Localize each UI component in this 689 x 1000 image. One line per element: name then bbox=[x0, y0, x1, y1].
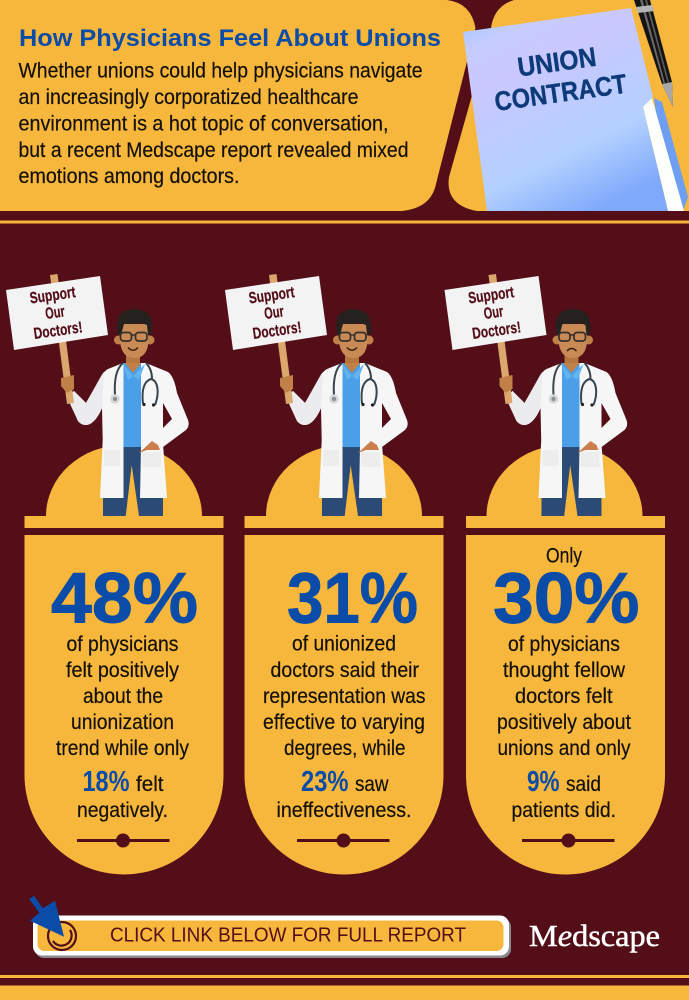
stat description: trend while only bbox=[56, 737, 189, 760]
doctor holding sign bbox=[225, 274, 408, 516]
stat description bbox=[56, 633, 189, 822]
button text: CLICK LINK BELOW FOR FULL REPORT bbox=[110, 924, 466, 946]
stat description: doctors felt bbox=[515, 685, 613, 708]
stat description: unionization bbox=[71, 711, 174, 734]
stat description bbox=[263, 632, 426, 822]
stat description: patients did. bbox=[512, 799, 616, 822]
sign text: Support bbox=[29, 284, 77, 307]
stat card bbox=[466, 535, 665, 874]
stat card bbox=[24, 535, 224, 874]
stat description: positively about bbox=[497, 711, 631, 734]
intro text: but a recent Medscape report revealed mixed bbox=[18, 139, 408, 162]
sign text: Our bbox=[483, 303, 504, 323]
panel: 30% bbox=[444, 274, 665, 874]
sign text bbox=[248, 284, 303, 343]
stat description: of physicians bbox=[66, 633, 178, 656]
stat description: unions and only bbox=[498, 737, 631, 760]
sign text: Doctors! bbox=[471, 319, 522, 343]
panel: header intro bbox=[0, 0, 689, 211]
sign text: Our bbox=[263, 303, 285, 323]
intro text: emotions among doctors. bbox=[18, 165, 240, 188]
intro text: Whether unions could help physicians navigate bbox=[18, 60, 422, 82]
stat description bbox=[497, 633, 631, 822]
icon: target rings bbox=[48, 922, 76, 950]
stat description: of unionized bbox=[292, 632, 396, 656]
sign text: Doctors! bbox=[252, 319, 303, 343]
stat number: 30% bbox=[493, 560, 640, 638]
call-to-action button bbox=[29, 896, 511, 958]
folder label: UNION bbox=[516, 42, 598, 82]
lead-in word: Only bbox=[546, 544, 582, 568]
stat description: saw bbox=[355, 773, 389, 796]
folder label: CONTRACT bbox=[493, 69, 629, 117]
sign text bbox=[29, 284, 84, 343]
panel: 48% bbox=[6, 274, 224, 874]
ornament divider bbox=[77, 834, 170, 848]
sign text: Support bbox=[248, 284, 296, 307]
podium dome and bar bbox=[244, 445, 444, 528]
doctor holding sign, frowning bbox=[444, 274, 627, 516]
stat description: thought fellow bbox=[503, 659, 626, 682]
podium dome and bar bbox=[24, 445, 224, 528]
icon: union contract folder bbox=[463, 8, 688, 211]
stat number: 31% bbox=[287, 560, 418, 638]
intro text bbox=[18, 60, 422, 188]
intro text: environment is a hot topic of conversation, bbox=[18, 112, 388, 136]
stat description: about the bbox=[83, 685, 163, 708]
stat description: 9% bbox=[527, 766, 560, 798]
stat description: effective to varying bbox=[263, 711, 425, 734]
stat description: representation was bbox=[263, 685, 426, 708]
stat description: ineffectiveness. bbox=[276, 799, 412, 822]
stat description: said bbox=[566, 773, 601, 796]
stat description: 18% bbox=[82, 766, 130, 798]
sign text: Doctors! bbox=[33, 319, 84, 343]
ornament divider bbox=[297, 834, 390, 848]
intro text: an increasingly corporatized healthcare bbox=[18, 86, 358, 109]
sign text bbox=[467, 284, 522, 343]
stat number: 48% bbox=[51, 560, 198, 638]
stat description: of physicians bbox=[508, 633, 620, 656]
stat description: degrees, while bbox=[284, 737, 406, 760]
podium dome and bar bbox=[466, 445, 665, 528]
stat card bbox=[244, 535, 444, 874]
title: How Physicians Feel About Unions bbox=[19, 25, 441, 52]
doctor holding sign bbox=[6, 274, 189, 516]
sign text: Our bbox=[44, 303, 66, 323]
sign text: Support bbox=[467, 284, 516, 307]
panel: 31% bbox=[225, 274, 444, 874]
icon: pen bbox=[634, 0, 673, 107]
logo: Medscape: Medscape bbox=[529, 918, 660, 953]
stat description: felt positively bbox=[66, 659, 179, 682]
folder label bbox=[493, 42, 629, 117]
stat description: 23% bbox=[301, 766, 349, 798]
ornament divider bbox=[522, 834, 614, 848]
divider lines top bbox=[0, 220, 689, 224]
stat description: negatively. bbox=[77, 799, 168, 822]
footer stripes bbox=[0, 975, 689, 1000]
icon: blue arrow bbox=[29, 896, 64, 937]
stat description: felt bbox=[136, 773, 164, 796]
stat description: doctors said their bbox=[270, 659, 419, 682]
